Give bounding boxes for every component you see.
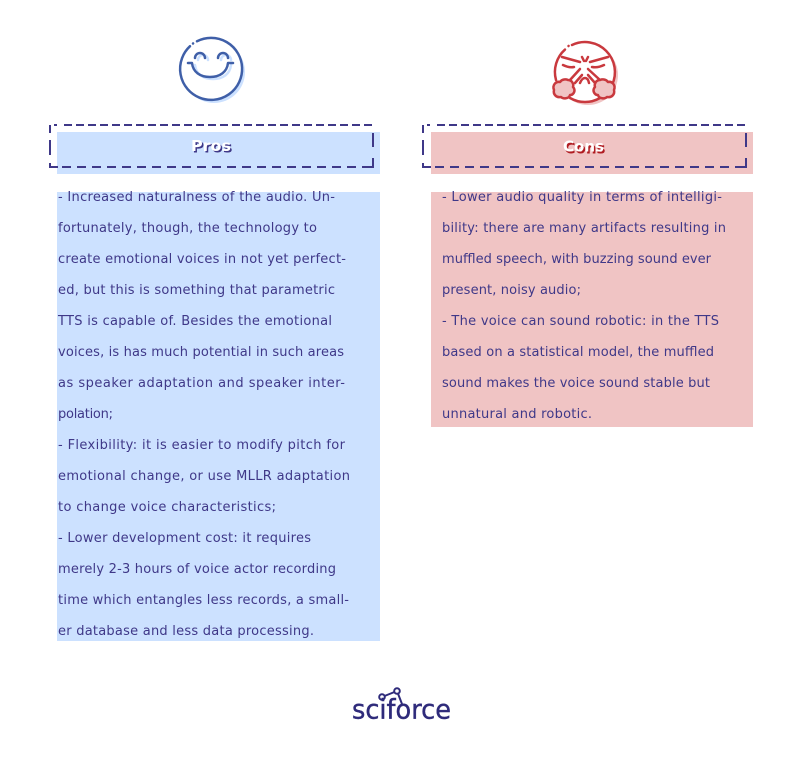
panel: pros body: emotional change, or use MLLR adaptation [58,469,350,484]
panel: pros body: to change voice characteristics; [58,500,276,515]
panel: pros body: - Lower development cost: it requires [58,531,311,546]
panel: pros header: Pros [191,137,231,155]
panel: cons body [431,190,753,427]
panel: pros body: time which entangles less records, a small- [58,593,349,608]
panel: cons header [423,125,753,174]
icon: smiling face [180,38,245,103]
panel: pros body: create emotional voices in not yet perfect- [58,252,346,267]
panel: cons body: muffled speech, with buzzing sound ever [442,252,712,267]
panel: cons header: Cons [564,140,606,158]
panel: cons body: - Lower audio quality in terms of intelligi- [442,190,722,205]
panel: cons header: Cons [563,138,604,156]
icon: angry face with steam [553,42,618,105]
panel: pros body: - Increased naturalness of the audio. Un- [58,190,335,205]
panel: pros body: er database and less data processing. [58,624,314,639]
panel: pros body [57,190,380,641]
panel: pros body: merely 2-3 hours of voice actor recording [58,562,336,577]
panel: pros body: polation; [58,407,113,422]
panel: cons body: present, noisy audio; [442,283,581,298]
panel: cons body: based on a statistical model, the muffled [442,345,714,360]
panel: pros header: Pros [192,138,232,156]
panel: pros body: - Flexibility: it is easier to modify pitch for [58,438,346,453]
panel: pros header [50,125,380,174]
panel: pros body: TTS is capable of. Besides the emotional [57,314,332,329]
panel: cons body: sound makes the voice sound stable but [442,376,710,391]
panel: cons body: unnatural and robotic. [442,407,592,422]
panel: pros body: fortunately, though, the technology to [58,221,317,236]
panel: cons body: bility: there are many artifacts resulting in [442,221,726,236]
panel: cons body: - The voice can sound robotic: in the TTS [442,314,719,329]
panel: pros body: ed, but this is something that parametric [58,283,335,298]
panel: pros body: voices, is has much potential in such areas [58,345,344,360]
panel: pros body: as speaker adaptation and speaker inter- [58,376,345,391]
logo: sciforce: sciforce [352,694,451,726]
